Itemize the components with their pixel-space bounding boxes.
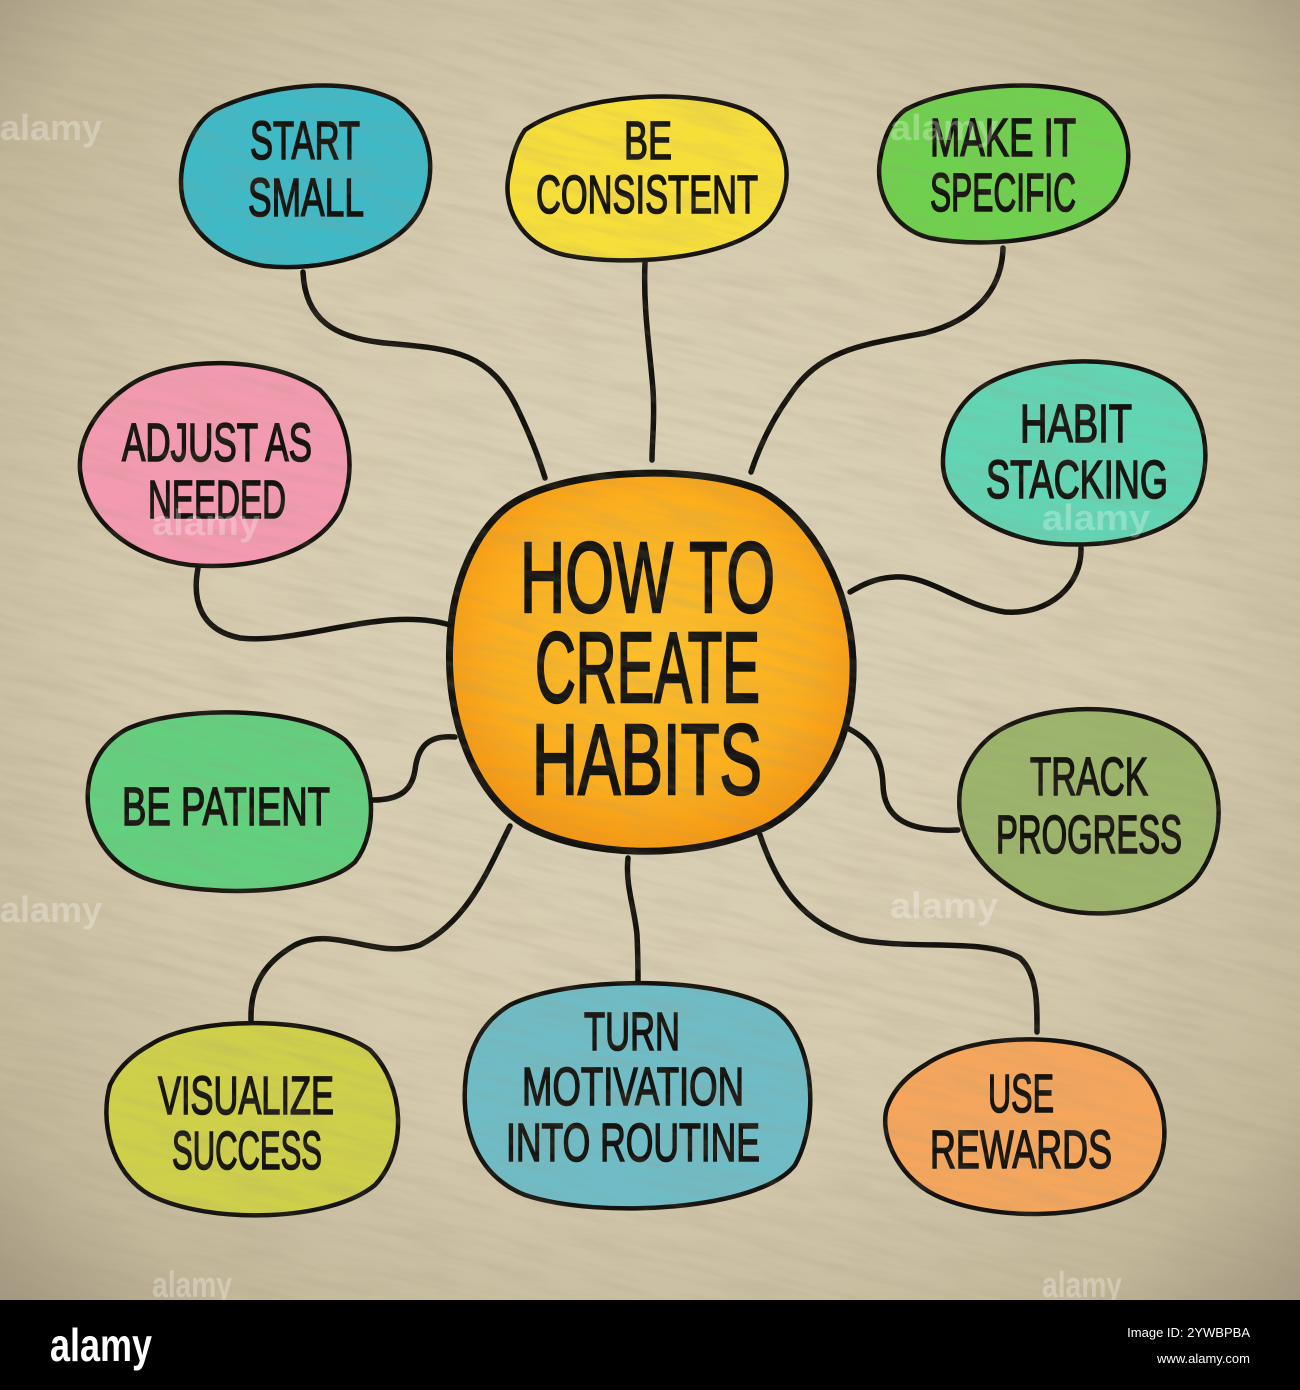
panel: centre topic, how to create habits: HOW TO bbox=[520, 522, 775, 634]
footer bar: www.alamy.com bbox=[1156, 1351, 1250, 1366]
panel: start small bbox=[181, 86, 430, 267]
panel: be patient bbox=[88, 712, 371, 891]
panel: track progress: PROGRESS bbox=[996, 805, 1182, 865]
panel: habit stacking bbox=[943, 361, 1205, 545]
panel: use rewards: USE bbox=[988, 1064, 1054, 1124]
panel: habit stacking: HABIT bbox=[1020, 394, 1132, 454]
panel: turn motivation into routine: TURN bbox=[584, 1002, 680, 1062]
watermarks: alamy bbox=[1042, 1264, 1122, 1305]
panel: centre topic, how to create habits bbox=[449, 473, 853, 851]
watermarks: alamy bbox=[890, 885, 998, 926]
panel: start small: START bbox=[250, 111, 360, 171]
panel: adjust as needed bbox=[80, 363, 350, 566]
watermarks: alamy bbox=[0, 889, 102, 930]
panel: track progress: TRACK bbox=[1030, 747, 1148, 807]
panel: be patient: BE PATIENT bbox=[122, 777, 330, 837]
panel: visualize success: SUCCESS bbox=[172, 1121, 322, 1181]
panel: use rewards bbox=[885, 1039, 1164, 1214]
watermarks: alamy bbox=[0, 107, 102, 148]
watermarks: alamy bbox=[1042, 497, 1150, 538]
panel: use rewards: REWARDS bbox=[930, 1120, 1112, 1180]
panel: be consistent: CONSISTENT bbox=[536, 165, 758, 225]
panel: centre topic, how to create habits: CREATE bbox=[535, 612, 760, 724]
panel: be consistent: BE bbox=[624, 111, 672, 171]
panel: make it specific: SPECIFIC bbox=[930, 163, 1076, 223]
panel: adjust as needed: ADJUST AS bbox=[122, 413, 312, 473]
watermarks: alamy bbox=[890, 107, 998, 148]
footer bar: Image ID: 2YWBPBA bbox=[1127, 1325, 1250, 1340]
watermarks: alamy bbox=[152, 1264, 232, 1305]
watermarks: alamy bbox=[152, 502, 260, 543]
watermarks bbox=[0, 107, 1150, 1305]
panel: habit stacking: STACKING bbox=[986, 450, 1168, 510]
panel: adjust as needed: NEEDED bbox=[148, 470, 286, 530]
panel: visualize success bbox=[106, 1023, 398, 1215]
panel: track progress bbox=[959, 709, 1219, 913]
panel: turn motivation into routine bbox=[465, 983, 810, 1208]
panel: make it specific: MAKE IT bbox=[930, 108, 1076, 168]
panel: turn motivation into routine: MOTIVATION bbox=[522, 1057, 744, 1117]
footer bar: alamy bbox=[50, 1319, 152, 1371]
panel: turn motivation into routine: INTO ROUTINE bbox=[506, 1113, 760, 1173]
connector lines from centre to topics bbox=[196, 248, 1081, 1032]
panel: make it specific bbox=[879, 86, 1128, 242]
panel: start small: SMALL bbox=[248, 168, 364, 228]
panel: centre topic, how to create habits: HABITS bbox=[532, 704, 762, 816]
panel: visualize success: VISUALIZE bbox=[158, 1066, 334, 1126]
panel: be consistent bbox=[507, 97, 787, 260]
footer bar bbox=[0, 1300, 1300, 1390]
